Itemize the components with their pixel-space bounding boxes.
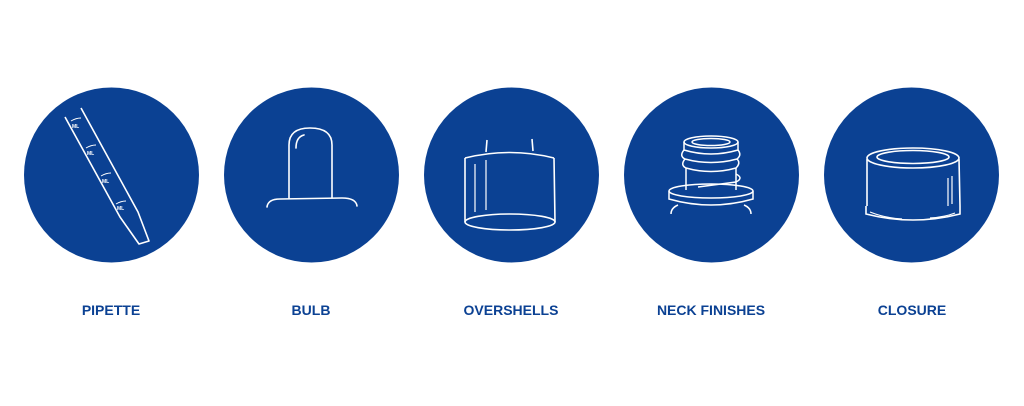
label: bulb: BULB (292, 302, 330, 318)
label: overshells: OVERSHELLS (464, 302, 558, 318)
icon: pipette: ML (87, 151, 94, 157)
circle: closure (824, 88, 999, 262)
icon: closure (866, 148, 960, 220)
circle: bulb (224, 88, 399, 262)
circle: overshells (424, 88, 599, 262)
icon: bulb (267, 128, 357, 207)
icon: pipette: ML (72, 124, 79, 130)
circle: neck finishes (624, 88, 799, 262)
icon: pipette: ML (102, 179, 109, 185)
panel: bulb (224, 88, 399, 318)
panel: overshells (424, 88, 599, 318)
circle: pipette (24, 88, 199, 262)
label: closure: CLOSURE (878, 302, 946, 318)
label: pipette: PIPETTE (82, 302, 140, 318)
icon: overshells (465, 139, 555, 230)
icon: pipette (65, 108, 149, 244)
panel: closure (824, 88, 999, 318)
panel: neck finishes (624, 88, 799, 318)
panel: pipette (24, 88, 199, 318)
icon: pipette: ML (117, 206, 124, 212)
label: neck finishes: NECK FINISHES (657, 302, 765, 318)
icon: neck finishes (669, 136, 753, 214)
